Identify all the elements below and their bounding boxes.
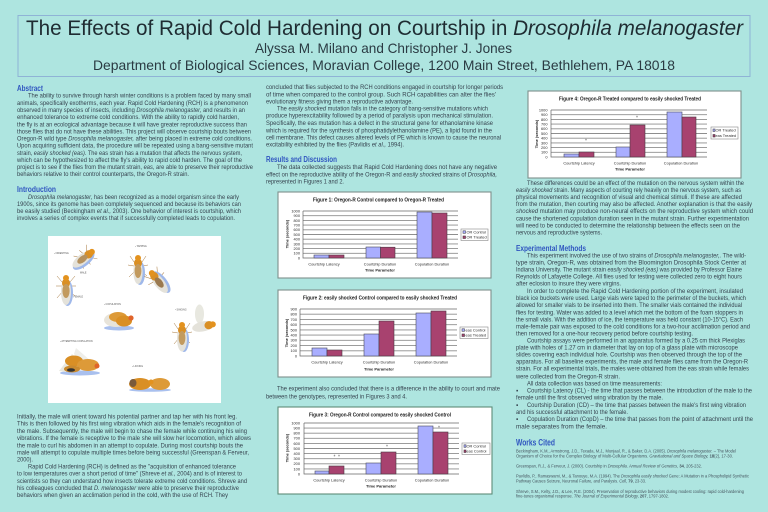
y axis ticks: 1000	[291, 420, 301, 425]
text: discussion of differences: nervous and reproductive systems.	[516, 230, 602, 237]
y axis ticks: 200	[294, 246, 301, 251]
text: experimental methods: strain. For all experimental trials, the males were obtained from the eas strain while females	[516, 366, 749, 373]
text: experimental methods	[515, 252, 753, 430]
y axis ticks: 400	[294, 237, 301, 242]
text: courtship description and RCH: This is then followed by his first wing vibration which aids in the female's recognition of	[17, 421, 241, 428]
y axis ticks: 200	[541, 145, 548, 150]
text: experimental methods: Reynolds of Lafayette College. All flies used for testing were collected zero to eight hours	[516, 274, 742, 281]
chart: figure 3: Time (seconds)	[284, 433, 290, 462]
y axis ticks: 500	[294, 232, 301, 237]
y axis ticks: 400	[290, 332, 298, 338]
text: courtship description and RCH: the male to curl his abdomen in an attempt to copulate. During most courtship bouts the	[17, 442, 243, 449]
text: discussion of differences: will need to be conducted to determine the relationship between the effects seen on the	[515, 223, 740, 230]
significance markers: *	[386, 444, 388, 450]
significance markers: *	[334, 454, 336, 460]
text: discussion of differences: These differences could be an effect of the mutation on the nervous system within the	[527, 180, 744, 187]
text: results	[266, 164, 497, 186]
category labels	[313, 477, 449, 482]
category labels: Courtship Latency	[311, 359, 343, 364]
legend: OR Treated	[466, 235, 487, 240]
chart: figure 2: Time Parameter	[364, 366, 394, 372]
y axis ticks: 500	[294, 446, 301, 451]
significance markers: *	[636, 116, 638, 122]
text: experimental methods: flies for testing. Water was added to a level which met the bottom of the foam stoppers in	[516, 309, 743, 316]
text: conclusion and easily shocked mutation: Specifically, the eas mutation has a defect in the structural gene for ethanolamine kinase	[266, 120, 493, 127]
text: experimental methods: Courtship assays were performed in an apparatus formed by a 0.25 cm thick Plexiglas	[527, 338, 745, 345]
fly labels	[54, 245, 187, 368]
legend: eas Treated	[716, 133, 736, 138]
text: discussion of differences: cause the shortened copulation duration seen in the mutant strain. Further experimentation	[516, 216, 749, 223]
text: experimental methods: male-female pair was exposed to the cold conditions for a two-hour acclimation period and	[516, 324, 750, 331]
heading: abstract: Abstract	[17, 84, 43, 93]
y axis ticks: 900	[290, 306, 298, 311]
text: abstract: enhanced tolerance to extreme cold conditions. With the ability to rapidly cold harden,	[17, 114, 239, 121]
icon: licking flies	[129, 378, 171, 392]
y axis ticks	[539, 107, 548, 159]
legend: eas Control	[466, 449, 487, 454]
y axis ticks: 800	[290, 312, 298, 317]
category labels: Copulation Duration	[415, 261, 449, 266]
bars	[315, 426, 448, 474]
chart: figure 3: Time Parameter	[366, 484, 396, 488]
chart: figure 1: Time (seconds)	[284, 219, 290, 248]
icon: copulation flies	[104, 312, 134, 330]
text: experimental methods: In order to complete the Rapid Cold Hardening portion of the experiment, insulated	[527, 288, 743, 295]
affiliation: Department of Biological Sciences, Moravian College, 1200 Main Street, Bethlehem, PA 18018	[93, 57, 675, 73]
y axis ticks: 0	[298, 255, 301, 260]
legend	[461, 229, 488, 240]
text: experimental methods: black ice buckets were used. Large vials were taped to the perimeter of the buckets, which	[516, 295, 746, 302]
fly labels: ▪ LICKING	[132, 365, 143, 368]
authors: Alyssa M. Milano and Christopher J. Jones	[255, 40, 512, 56]
text: abstract: Oregon-R wild type Drosophila melanogaster, after being placed in extreme cold conditions.	[17, 136, 252, 142]
legend	[460, 327, 488, 338]
y axis ticks: 300	[294, 456, 301, 461]
text: abstract: project is to see if the flies from the mutant strain, eas, are able to preserve their reproductive	[17, 164, 253, 171]
heading: results and discussion: Results and Discussion	[266, 155, 337, 164]
text: experimental methods: female until the first observed wing vibration by the male.	[516, 395, 663, 402]
text: references: Beckingham, K.M., Armstrong, J.D., Texada, M.J., Munjaal, R., & Baker, D.A. (2005). Drosophila melanogaster. – The Model	[516, 448, 736, 454]
category labels: Courtship Duration	[364, 261, 396, 266]
text: experimental methods: ▪	[516, 416, 518, 423]
chart: figure 2: Time (seconds)	[284, 318, 289, 347]
category labels: Copulation Duration	[415, 477, 449, 482]
heading: introduction: Introduction	[17, 185, 56, 194]
text: courtship description and RCH: the male. Subsequently, the male will begin to chase the female while continuing his wing	[17, 428, 247, 435]
text: genotype difference	[266, 386, 500, 401]
text: experimental methods: Copulation Duration (CopD) – the time that passes from the point of attachment until the	[527, 416, 753, 423]
text: courtship description and RCH: scientists so they can understand how insects tolerate extreme cold conditions. Shreve and	[17, 478, 247, 485]
text: abstract: those flies that do not have these abilities. This project will observe courtship bouts between	[17, 128, 251, 135]
text: abstract: which can be hypothesized to affect the fly's ability to rapid cold harden. The goal of the	[16, 157, 242, 164]
text: introduction: 1900s, since its genome has been completely sequenced and because its behaviors can	[17, 201, 241, 208]
text: experimental methods: male separates from the female.	[516, 423, 607, 430]
y axis ticks: 1000	[291, 208, 301, 213]
significance markers: *	[438, 426, 440, 432]
fly labels: MALE	[80, 272, 87, 274]
text: courtship description and RCH	[17, 414, 251, 499]
y axis ticks: 500	[541, 131, 548, 136]
y axis ticks: 500	[290, 327, 298, 332]
y axis ticks: 800	[294, 218, 301, 223]
significance markers: *	[338, 454, 340, 460]
y axis ticks: 100	[294, 466, 301, 471]
text: experimental methods: Courtship Duration (CD) – the time that passes between the male's first wing vibration	[527, 402, 746, 409]
text: discussion of differences: easily shocked strain. Many aspects of courting rely heavily on the nervous system, such as	[516, 187, 741, 194]
text: experimental methods: after eclosion to insure they were virgins.	[516, 281, 621, 288]
illustration: courtship behaviours of flies	[48, 236, 221, 403]
text: courtship description and RCH: vibrations. If the female is receptive to the male she will slow her locomotion, which allows	[17, 435, 251, 442]
text: references	[516, 448, 749, 500]
y axis ticks: 900	[294, 213, 301, 218]
text: conclusion and easily shocked mutation: of time when compared to the control group. Such RCH capabilities can alter the flies'	[266, 91, 496, 98]
category labels	[563, 160, 698, 165]
y axis ticks: 600	[294, 441, 301, 446]
y axis ticks: 400	[294, 451, 301, 456]
y axis ticks: 300	[294, 241, 301, 246]
chart: figure 1: Figure 1: Oregon-R Control compared to Oregon-R Treated	[313, 198, 444, 204]
text: abstract: the fly is at an ecological advantage because it will have greater reproductive success than	[17, 121, 247, 128]
category labels: Courtship Duration	[363, 359, 395, 364]
y axis ticks: 700	[294, 436, 301, 441]
text: experimental methods: then removed for a one-hour recovery period before courtship testing.	[516, 331, 693, 338]
text: abstract: Upon acquiring sufficient data, the procedure will be repeated using a bang-sensitive mutant	[17, 143, 253, 150]
heading: experimental methods: Experimental Methods	[516, 244, 586, 253]
text: courtship description and RCH: his colleagues concluded that D. melanogaster were able to preserve their reproductive	[17, 485, 239, 492]
text: courtship description and RCH: 2000).	[17, 456, 33, 463]
y axis ticks	[291, 420, 301, 476]
text: abstract: animals, specifically exotherms, each year. Rapid Cold Hardening (RCH) is a phenomenon	[17, 100, 248, 107]
bars	[564, 112, 696, 157]
text: references: Greenspan, R.J., & Ferveur, J. (2000). Courtship in Drosophila. Annual Review of Genetics, 34, 205-232.	[516, 464, 702, 470]
text: experimental methods: slides covering each individual hole. Courtship was then observed through the top of the	[516, 352, 742, 359]
text: experimental methods: Indiana University. The mutant strain easily shocked (eas) was provided by Professor Elaine	[516, 267, 742, 274]
text: experimental methods: the small vials. With the addition of ice, the temperature was held constant (10-15°C). Each	[516, 315, 743, 323]
y axis ticks: 0	[545, 154, 548, 159]
text: experimental methods: All data collection was based on time measurements:	[527, 380, 662, 387]
icon: singing flies	[172, 304, 217, 352]
y axis ticks: 300	[541, 140, 548, 145]
text: abstract: observed in many species of insects, including Drosophila melanogaster, and results in an	[17, 107, 245, 114]
text: discussion of differences: physical movements and recognition of visual and chemical stimuli. If these are affected	[516, 194, 742, 201]
text: conclusion and easily shocked mutation: cell membrane. This defect causes altered levels of PE which is known to cause the neuronal	[266, 134, 501, 141]
text: experimental methods: Courtship Latency (CL) - the time that passes between the introduction of the male to the	[527, 388, 752, 395]
category labels: Courtship Latency	[563, 160, 595, 165]
text: introduction: be easily studied (Beckingham et al., 2003). One behavior of interest is courtship, which	[17, 208, 241, 215]
y axis ticks: 200	[294, 461, 301, 466]
text: conclusion and easily shocked mutation: excitability exhibited by the flies (Pavlidis et al., 1994).	[266, 141, 404, 148]
legend: OR Control	[466, 229, 486, 234]
text: genotype difference: The experiment also concluded that there is a difference in the ability to court and mate	[277, 386, 500, 393]
y axis ticks: 900	[541, 112, 548, 117]
title banner	[18, 16, 750, 76]
text: abstract: behaviors relative to their control counterparts, the Oregon-R strain.	[17, 171, 189, 178]
text: courtship description and RCH: Initially, the male will orient toward his potential partner and tap her with his front leg.	[17, 414, 237, 421]
y axis ticks: 600	[290, 322, 298, 327]
chart: figure 3	[278, 407, 492, 494]
text: results: effect on the reproductive ability of the Oregon-R and easily shocked strains of Drosophila,	[266, 171, 497, 178]
chart: figure 3: Figure 3: Oregon-R Control compared to easily shocked Control	[309, 413, 452, 419]
category labels: Courtship Duration	[365, 477, 397, 482]
fly labels: ▪ COPULATION	[104, 303, 121, 306]
text: references: Organism of Choice for the Complex Biology of Multi-Cellular Organisms. Gravitational and Space Biology, 18(2), 17-30.	[516, 454, 733, 460]
fly labels: FEMALE	[74, 296, 83, 298]
category labels: Copulation Duration	[664, 160, 698, 165]
text: introduction: involves a series of complex events that if successfully completed leads to copulation.	[17, 215, 235, 222]
category labels: Copulation Duration	[414, 359, 448, 364]
chart: figure 4: Time (seconds)	[534, 119, 539, 148]
text: references: fine-tunes organismal response. The Journal of Experimental Biology, 207, 1797-1802.	[516, 494, 669, 500]
text: courtship description and RCH: behaviors when given an acclimation period in the cold, with the use of RCH. They	[17, 492, 229, 499]
chart: figure 2: Figure 2: easily shocked Control compared to easily shocked Treated	[303, 296, 457, 302]
legend	[711, 127, 738, 139]
y axis ticks: 0	[298, 471, 301, 476]
y axis ticks: 700	[290, 317, 298, 322]
heading: works cited: Works Cited	[516, 438, 555, 448]
text: introduction: Drosophila melanogaster, has been recognized as a model organism since the early	[28, 194, 240, 201]
legend	[462, 443, 490, 454]
chart: figure 4: Time Parameter	[615, 166, 645, 172]
text: discussion of differences: from the mutation, then courting may also be affected. Another explanation is that the easily	[516, 201, 753, 208]
fly labels: ▪ TAPPING	[135, 245, 147, 248]
text: abstract: strain, easily shocked (eas). The eas strain has a mutation that affects the nervous system,	[17, 150, 242, 157]
fly labels: ▪ ORIENTING	[54, 252, 69, 255]
y axis ticks: 100	[541, 150, 548, 155]
y axis ticks	[291, 208, 301, 260]
text: experimental methods: allowed for smaller vials to be inserted into them. The smaller vials contained the individual	[516, 302, 742, 309]
text: conclusion and easily shocked mutation: produce hyperexcitability followed by a period of paralysis upon mechanical stimulation.	[266, 113, 493, 120]
bars	[312, 311, 446, 356]
text: courtship description and RCH: to low temperatures over a short period of time" (Shreve et al., 2004) and is of interest to	[17, 471, 242, 478]
text: discussion of differences: shocked mutation may produce non-neural effects on the reproductive system which could	[516, 208, 753, 215]
y axis ticks: 800	[541, 117, 548, 122]
text: experimental methods: plate with holes of 1.27 cm in diameter that lay on top of a glass plate with microscope	[516, 345, 738, 352]
fly labels: ▪ ATTEMPTING COPULATION	[60, 340, 93, 343]
text: experimental methods: type strain, Oregon-R, was obtained from the Bloomington Drosophila Stock Center at	[516, 259, 746, 266]
text: experimental methods: ▪	[516, 402, 518, 409]
bars	[314, 212, 447, 258]
text: conclusion and easily shocked mutation: concluded that flies subjected to the RCH conditions engaged in courtship for longer periods	[266, 84, 503, 91]
y axis ticks: 1000	[539, 107, 548, 112]
legend: eas Control	[466, 327, 486, 332]
text: courtship description and RCH: Rapid Cold Hardening (RCH) is defined as the "acquisition of enhanced tolerance	[28, 464, 236, 471]
text: conclusion and easily shocked mutation: The easily shocked mutation falls in the category of bang-sensitive mutations which	[277, 106, 488, 113]
y axis ticks: 200	[290, 343, 298, 348]
category labels: Courtship Duration	[614, 160, 646, 165]
legend: OR Control	[466, 443, 486, 448]
text: references: Pavlidis, P., Ramaswami, M., & Tanouye, M.A. (1994). The Drosophila easily shocked Gene: A Mutation in a Phospholipid Synthetic	[516, 474, 749, 480]
legend: OR Treated	[716, 128, 736, 133]
chart: figure 4	[528, 91, 741, 178]
text: abstract: The ability to survive through harsh winter conditions is a problem faced by many small	[28, 93, 251, 100]
text: experimental methods: apparatus. For all baseline experiments, the male and female flies came from the Oregon-R	[516, 359, 748, 366]
text: experimental methods: This experiment involved the use of two strains of Drosophila melanogaster,. The wild-	[527, 252, 746, 259]
text: results: The data collected suggests that Rapid Cold Hardening does not have any negative	[277, 164, 497, 171]
text: experimental methods: and his successful attachment to the female.	[516, 409, 628, 416]
text: references: Pathway Causes Seizure, Neuronal Failure, and Paralysis. Cell, 79, 23-33.	[516, 479, 646, 485]
y axis ticks: 300	[290, 338, 298, 343]
text: discussion of differences	[515, 180, 753, 237]
significance markers: *	[585, 138, 587, 144]
y axis ticks: 900	[294, 426, 301, 430]
y axis ticks	[290, 306, 298, 358]
y axis ticks: 700	[294, 222, 301, 228]
y axis ticks: 600	[294, 227, 301, 232]
category labels	[308, 261, 449, 266]
icon: orienting flies	[56, 243, 100, 306]
category labels	[311, 359, 448, 364]
y axis ticks: 400	[541, 136, 548, 141]
y axis ticks: 100	[290, 348, 298, 353]
category labels: Courtship Latency	[308, 261, 340, 266]
text: genotype difference: between the genotypes, represented in Figures 3 and 4.	[266, 394, 407, 401]
y axis ticks: 600	[541, 126, 548, 131]
text: courtship description and RCH: male will attempt to copulate multiple times before being successful (Greenspan & Ferveur,	[17, 449, 249, 456]
text: introduction	[17, 194, 241, 222]
text: experimental methods: were collected from the Oregon-R strain.	[515, 373, 620, 380]
y axis ticks: 100	[294, 251, 301, 256]
category labels: Courtship Latency	[313, 477, 345, 482]
chart: figure 1	[278, 192, 491, 278]
icon: tapping flies	[128, 255, 176, 300]
text: abstract	[16, 93, 253, 178]
text: conclusion and easily shocked mutation: evolutionary fitness giving them a reproductive advantage.	[266, 98, 413, 105]
text: conclusion and easily shocked mutation: which is required for the synthesis of phosphatidylethanolamine (PE), a lipid found in the	[265, 127, 492, 134]
significance markers	[334, 426, 440, 460]
y axis ticks: 700	[541, 122, 548, 126]
significance markers	[585, 116, 638, 144]
text: conclusion and easily shocked mutation	[265, 84, 503, 148]
text: experimental methods: ▪	[516, 388, 518, 395]
chart: figure 1: Time Parameter	[365, 268, 395, 272]
y axis ticks: 0	[295, 353, 298, 358]
text: results: represented in Figures 1 and 2.	[266, 179, 344, 186]
chart: figure 4: Figure 4: Oregon-R Treated compared to easily shocked Treated	[559, 97, 701, 103]
fly labels: ▪ SINGING	[175, 308, 187, 312]
legend: eas Treated	[466, 333, 486, 338]
title: The Effects of Rapid Cold Hardening on Courtship in Drosophila melanogaster	[26, 17, 744, 40]
chart: figure 2	[278, 290, 491, 377]
icon: attempting copulation flies	[59, 348, 100, 376]
y axis ticks: 800	[294, 431, 301, 436]
